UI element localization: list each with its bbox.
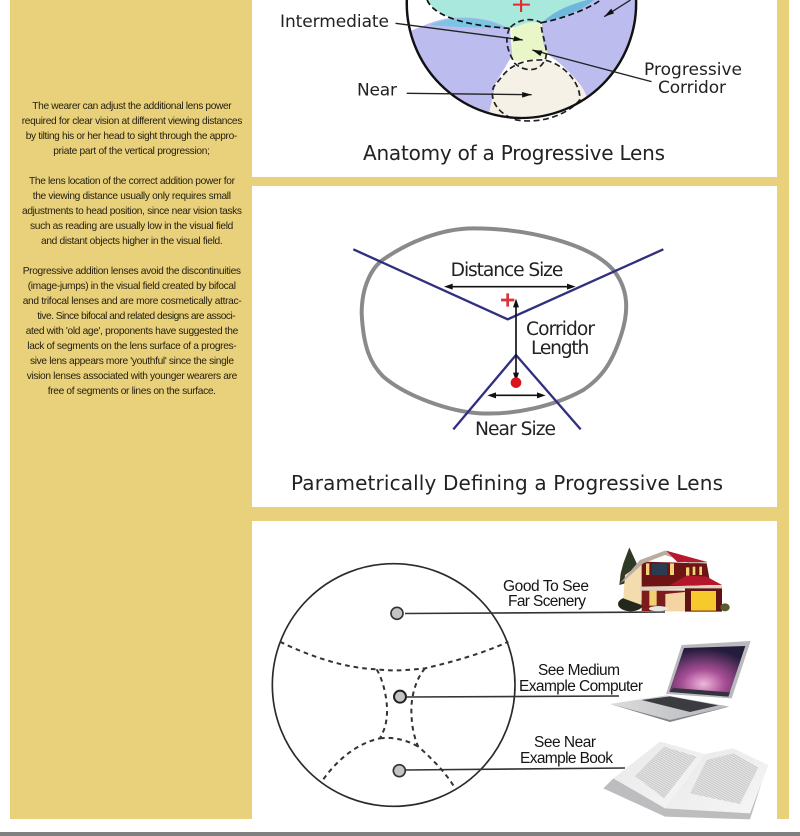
panel: viewing zones [252, 521, 777, 836]
lens parameter diagram: Near Size [475, 419, 556, 440]
text block: lens explanation: ated with 'old age', proponents have suggested the [26, 326, 239, 337]
text block: lens explanation [22, 101, 242, 397]
text block: lens explanation: vision lenses associated with younger wearers are [27, 371, 238, 382]
panel: anatomy of a progressive lens [252, 0, 777, 177]
text block: lens explanation: sive lens appears more 'youthful' since the single [30, 356, 234, 367]
text block: lens explanation: Progressive addition lenses avoid the discontinuities [23, 266, 241, 277]
zone labels: Corridor [658, 78, 726, 98]
icon: house [618, 547, 730, 612]
title: anatomy: Anatomy of a Progressive Lens [363, 141, 665, 165]
label: far: Far Scenery [508, 593, 586, 610]
text block: lens explanation: the viewing distance usually only requires small [33, 191, 231, 202]
text block: lens explanation: (image-jumps) in the visual field created by bifocal [28, 281, 236, 292]
icon: open book [603, 742, 768, 819]
lens parameter diagram: Length [531, 338, 589, 359]
bottom bar [0, 832, 800, 836]
text block: lens explanation: free of segments or lines on the surface. [48, 386, 216, 397]
text block: lens explanation: adjustments to head position, since near vision tasks [22, 206, 242, 217]
label: medium: See Medium [538, 662, 620, 679]
zone labels: Progressive [644, 60, 742, 80]
label: near: See Near [534, 734, 596, 751]
zone labels: Intermediate [280, 12, 389, 32]
label: near: Example Book [520, 750, 613, 767]
text block: lens explanation: lack of segments on the lens surface of a progres- [27, 341, 237, 352]
zone labels [280, 12, 742, 100]
label: far: Good To See [503, 578, 589, 595]
text block: lens explanation: tive. Since bifocal and related designs are associ- [37, 311, 236, 322]
lens zone diagram [272, 564, 515, 806]
lens circle with zones [396, 0, 652, 121]
title: parametric: Parametrically Defining a Progressive Lens [291, 471, 723, 495]
text block: lens explanation: by tilting his or her head to sight through the appro- [26, 131, 237, 142]
icon: laptop [610, 641, 751, 722]
connector lines [405, 612, 665, 770]
label: far [503, 578, 589, 610]
text block: lens explanation: The wearer can adjust the additional lens power [32, 101, 232, 112]
lens parameter diagram [353, 228, 663, 440]
text block: lens explanation: The lens location of the correct addition power for [29, 176, 236, 187]
lens parameter diagram: Corridor [526, 319, 595, 340]
text block: lens explanation: and distant objects higher in the visual field. [41, 236, 223, 247]
label: medium [519, 662, 643, 695]
zone labels: Near [357, 80, 397, 100]
lens parameter diagram: Distance Size [451, 260, 563, 281]
text block: lens explanation: required for clear vision at different viewing distances [22, 116, 242, 127]
panel: parametric definition [252, 186, 777, 507]
text block: lens explanation: and trifocal lenses and are more cosmetically attrac- [23, 296, 242, 307]
text block: lens explanation: priate part of the vertical progression; [53, 146, 210, 157]
label: medium: Example Computer [519, 678, 643, 695]
text block: lens explanation: such as reading are usually low in the visual field [30, 221, 234, 232]
label: near [520, 734, 613, 767]
